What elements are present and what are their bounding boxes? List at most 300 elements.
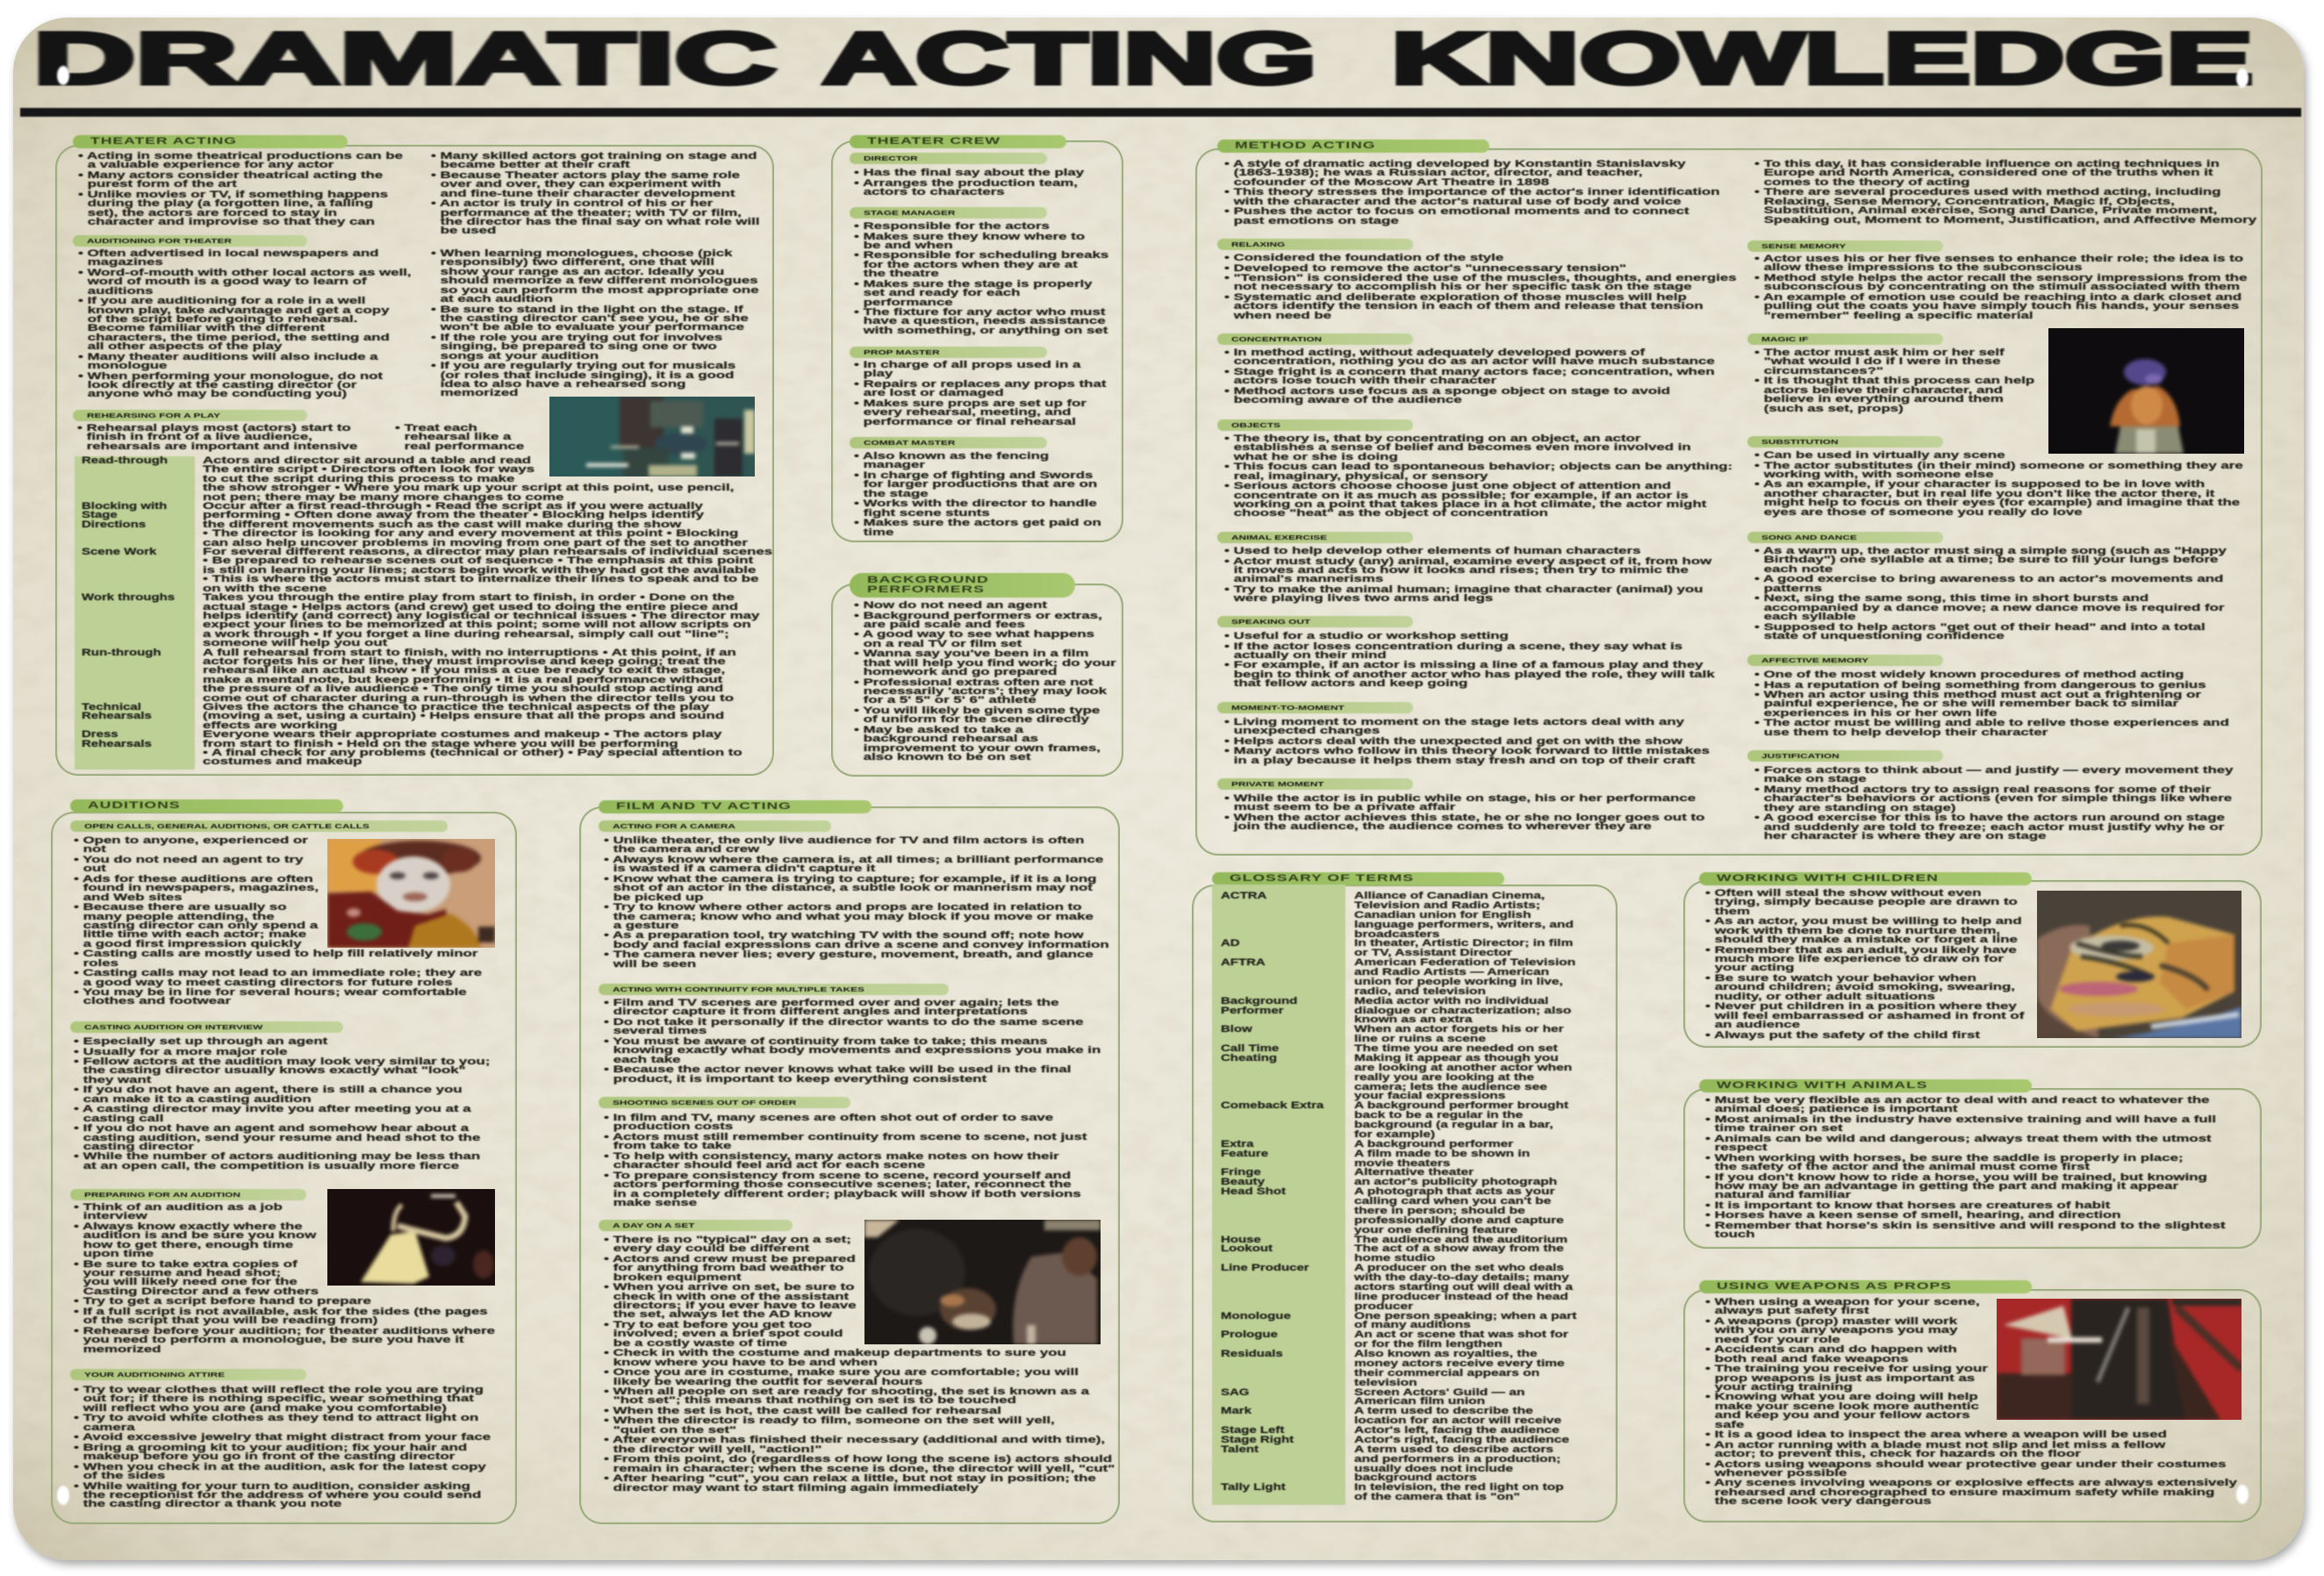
table: glossary terms: Residuals [1221,1349,1283,1359]
table: glossary definitions: location for an actor will receive [1354,1415,1561,1426]
text: song and dance: each note [1764,564,1833,575]
table: rehearsal type terms: Work throughs [82,592,175,603]
table: glossary definitions: Alliance of Canadian Cinema, [1354,891,1545,901]
text: shooting scenes out of order: actors performing those consecutive scenes; later, reconnect the [613,1179,1072,1190]
text: acting with continuity: • Because the actor never knows what take will be used in the final [604,1064,1071,1075]
text: song and dance: Birthday") one syllable at a time; be sure to fill your lungs before [1764,555,2218,565]
text: affective memory: • One of the most widely known procedures of method acting [1754,670,2184,680]
table: glossary definitions: line producer instead of the head [1354,1292,1568,1302]
text: song and dance: • As a warm up, the actor must sing a simple song (such as "Happy [1754,546,2227,556]
text: auditioning for theater right: • If the role you are trying out for involves [431,333,722,343]
text: background performers: background rehearsal as [864,734,1038,744]
text: magic if: • It is thought that this process can help [1754,376,2034,386]
text: combat master: the stage [864,489,929,499]
text: acting for a camera: a gesture [613,921,679,931]
text: concentration: • Stage fright is a concern that many actors face; concentration, when [1224,367,1715,377]
text: sense memory: • Actor uses his or her five senses to enhance their role; the idea is to [1754,254,2243,264]
text: audition wardrobe: of the sides [83,1471,165,1481]
image: stage scene [549,397,755,476]
text: auditioning for theater right: idea to also have a rehearsed song [441,379,685,390]
table: rehearsal type descriptions: The entire script • Directors often look for ways [203,464,534,475]
table: rehearsal type descriptions: from start to finish • Held on the stage where you will be performing [203,739,678,749]
text: a day on a set: involved; even a brief spot could [613,1329,843,1339]
text: cattle calls: • You may be in line for several hours; wear comfortable [74,987,467,998]
text: rehearsing note [395,423,525,453]
text: casting audition: • If you do not have an agent and somehow hear about a [74,1123,469,1134]
text: acting with continuity: several times [613,1026,707,1036]
text: using weapons as props: both real and fake weapons [1715,1354,1908,1365]
text: shooting scenes out of order [604,1114,1087,1208]
table: glossary terms: Background [1221,996,1297,1006]
text: casting audition: they want [83,1075,151,1085]
table: glossary definitions: television [1354,1378,1417,1388]
text: a day on a set: • Actors and crew must be prepared [604,1254,856,1264]
text: concentration: • Method actors use focus as a sponge object on stage to avoid [1224,386,1670,397]
text: acting for a camera: • Always know where the camera is, at all times; a brilliant performance [604,855,1103,865]
text: a day on a set [604,1236,1115,1494]
table: rehearsal type descriptions: expect your lines to be memorized at this point; some will not allow scripts on [203,620,751,630]
text: acting with continuity: product, it is important to keep everything consistent [613,1074,986,1085]
text: substitution: another character, but in real life you don't like the actor there, it [1764,489,2214,499]
text: affective memory: • Has a reputation of being something from dangerous to genius [1754,679,2206,690]
text: magic if: circumstances?" [1764,366,1883,376]
text: auditioning for theater: word of mouth is a good way to learn of [88,276,367,287]
text: combat master: fight scene stunts [864,508,990,519]
text: preparing for an audition: interview [83,1211,147,1221]
subheading: director [850,153,1047,164]
text: magic if: actors believe their character, and [1764,385,2003,396]
text: shooting scenes out of order: make sense [613,1198,697,1208]
table: glossary terms [1221,892,1323,1493]
table: glossary terms: Line Producer [1221,1263,1309,1273]
text: a day on a set: • When the director is ready to film, someone on the set will yell, [604,1415,1055,1426]
text: auditioning for theater right: memorized [441,388,519,398]
text: concentration: concentration, nothing you do as an actor will have much substance [1234,356,1715,367]
text: a day on a set: • Check in with the costume and makeup departments to sure you [604,1348,1066,1358]
table: glossary definitions: of many auditions [1354,1320,1471,1330]
text: private moment: join the audience, the audience comes to wherever they are [1234,821,1652,832]
text: background performers: necessarily 'actors'; they may look [864,686,1107,697]
text: audition wardrobe: will reflect who you are (and make you comfortable) [83,1403,447,1414]
text: acting for a camera: • The camera never lies; every gesture, movement, breath, and glance [604,949,1094,960]
text: acting for a camera: body and facial expressions can drive a scene and convey information [613,940,1109,950]
text: sense memory: subconscious by concentrating on the stimuli associated with them [1764,282,2240,292]
table: glossary definitions: A term used to describe the [1354,1406,1533,1416]
text: song and dance: each syllable [1764,612,1856,622]
table: rehearsal type terms: Technical [82,702,141,713]
text: animal exercise [1224,547,1711,605]
text: speaking out: • Useful for a studio or workshop setting [1224,631,1509,641]
text: animal exercise: animal's mannerisms [1234,574,1383,584]
table: glossary definitions: back to be a regular in the [1354,1110,1523,1121]
table: rehearsal type descriptions: rehearsal like an actual show • If you miss a cue be ready to exit the stage, [203,665,725,676]
heading: film and tv acting: FILM AND TV ACTING [616,801,792,812]
table: glossary terms: Feature [1221,1149,1268,1159]
text: preparing for an audition: of the script that you will be reading from) [83,1315,377,1326]
table: rehearsal type descriptions: • A final check for any problems (technical or other) • Pay special attention to [203,748,742,758]
text: magic if: (such as set, props) [1764,404,1904,414]
text: using weapons as props: • An actor running with a blade must not slip and let miss a fellow [1705,1440,2165,1451]
text: cattle calls: out [83,863,106,874]
heading: using weapons as props: USING WEAPONS AS PROPS [1717,1281,1952,1292]
text: stage manager: with something, or anything on set [864,326,1108,336]
heading: background performers: BACKGROUND [867,575,989,585]
text: method acting intro right: Relaxing, Sense Memory, Concentration, Magic If, Objects, [1764,197,2175,207]
table: glossary terms: Beauty [1221,1177,1265,1187]
text: a day on a set: • There is no "typical" day on a set; [604,1235,851,1245]
panel: working with animals [1683,1088,2262,1249]
subheading: a day on a set: A DAY ON A SET [613,1221,694,1229]
table: glossary definitions: Media actor with no individual [1354,996,1548,1006]
text: using weapons as props [1705,1298,2237,1508]
text: combat master: • Makes sure the actors get paid on [854,518,1101,528]
table: glossary definitions: really you are looking at the [1354,1072,1534,1083]
text: magic if: believe in everything around them [1764,394,2004,405]
subheading: song and dance: SONG AND DANCE [1761,534,1857,541]
subheading: a day on a set [599,1220,793,1231]
text: background performers: homework and go prepared [864,667,1057,677]
heading: using weapons as props [1699,1280,2032,1293]
heading: working with animals [1699,1079,2032,1092]
text: a day on a set: • When all people on set are ready for shooting, the set is known as a [604,1386,1089,1397]
text: justification: • Many method actors try to assign real reasons for some of their [1754,784,2211,795]
text: cattle calls: • Casting calls are mostly used to help fill relatively minor [74,949,477,959]
table: rehearsal type terms: Read-through [82,455,168,466]
text: cattle calls: • Open to anyone, experienced or [74,835,308,846]
text: shooting scenes out of order: • To help with consistency, many actors make notes on how their [604,1151,1059,1162]
table: rehearsal type column [75,456,195,770]
text: director: actors to characters [864,187,1005,197]
text: audition wardrobe: • Try to wear clothes that will reflect the role you are trying [74,1385,484,1395]
table: glossary definitions: An act or scene that was shot for [1354,1329,1568,1340]
text: song and dance: patterns [1764,584,1822,594]
text: auditioning for theater: • Word-of-mouth with other local actors as well, [78,268,412,278]
text: substitution [1754,451,2243,518]
table: glossary definitions: Actor's left, facing the audience [1354,1425,1560,1436]
subheading: concentration [1217,333,1413,345]
subheading: relaxing [1217,239,1413,250]
table: glossary definitions: broadcasters [1354,928,1439,939]
table: glossary terms: SAG [1221,1386,1249,1397]
table: glossary definitions: A film made to be shown in [1354,1149,1530,1159]
text: working with animals [1705,1096,2226,1241]
table: glossary terms: Talent [1221,1444,1259,1455]
text: affective memory: • When an actor using this method must act out a frightening or [1754,690,2201,700]
text: acting for a camera: • Know what the camera is trying to capture; for example, if it is a long [604,874,1096,885]
text: working with animals: • Must be very flexible as an actor to deal with and react to whatever the [1705,1095,2210,1106]
subheading: objects [1217,419,1413,431]
text: preparing for an audition: how to get there, enough time [83,1240,293,1250]
text: speaking out: that fellow actors and keep going [1234,678,1467,689]
text: substitution: • The actor substitutes (in their mind) someone or something they are [1754,460,2243,470]
text: a day on a set: know where you have to be and when [613,1358,878,1368]
text: working with children: • Often will steal the show without even [1705,888,1981,899]
subheading: private moment [1217,778,1413,790]
text: auditioning for theater right: the casting director can't see you, he or she [441,313,749,324]
text: using weapons as props: whenever possible [1715,1468,1847,1479]
text: auditioning for theater right: (or roles that include singing), it is a good [441,370,734,381]
text: background performers: • May be asked to take a [854,725,1023,735]
text: justification: character's behaviors or actions (even for simple things like where [1764,793,2232,804]
text: director: • Has the final say about the play [854,168,1084,178]
text: method acting intro: past emotions on stage [1234,216,1399,226]
text: using weapons as props: always put safety first [1715,1306,1869,1316]
subheading: acting for a camera: ACTING FOR A CAMERA [613,822,735,830]
panel: glossary of terms [1192,885,1617,1522]
title rule [20,108,2301,117]
text: auditioning for theater: anyone who may be conducting you) [88,389,347,399]
text: a day on a set: • Try to eat before you get too [604,1320,812,1330]
title [33,18,2254,99]
text: acting with continuity: each take [613,1055,680,1065]
subheading: animal exercise: ANIMAL EXERCISE [1231,534,1327,541]
text: moment to moment [1224,718,1710,766]
table: glossary definitions: movie theaters [1354,1158,1450,1169]
heading: background performers: PERFORMERS [867,584,985,595]
text: stage manager [854,222,1108,336]
text: background performers: • Background performers or extras, [854,611,1102,621]
text: preparing for an audition: you will likely need one for the [83,1277,298,1287]
text: combat master: time [864,527,893,538]
table: glossary definitions: In television, the red light on top [1354,1482,1564,1493]
text: auditioning for theater: of the script before going to rehearsal. [88,314,357,325]
table: glossary terms: Mark [1221,1406,1252,1416]
text: theater acting intro right: performance at the theater; with TV or film, [441,208,742,218]
text: working with animals: • If you don't know how to ride a horse, you will be trained, but knowing [1705,1172,2207,1183]
panel: theater crew [831,140,1123,542]
text: using weapons as props: • Actors using weapons should wear protective gear under their costumes [1705,1459,2227,1470]
text: substitution: working with, with someone else [1764,469,1994,480]
text: working with children: around children; avoid smoking, swearing, [1715,982,2015,992]
text: theater acting intro right: became better at their craft [441,160,630,170]
table: glossary definitions: line or ruins a scene [1354,1034,1486,1044]
text: auditioning for theater right: responsibly) two different, one that will [441,257,714,268]
text: auditioning for theater right: • When learning monologues, choose (pick [431,248,732,259]
text: stage manager: • Makes sure the stage is properly [854,279,1093,290]
text: rehearsing note: real performance [405,441,524,452]
subheading: justification: JUSTIFICATION [1761,752,1840,760]
text: prop master: are lost or damaged [864,388,1004,398]
table: glossary definitions: Television and Radio Artists; [1354,900,1540,911]
mounting hole: top right [2236,68,2249,88]
table: glossary terms: Extra [1221,1139,1253,1150]
table: glossary terms: Tally Light [1221,1482,1286,1493]
text: method acting intro right: Speaking out, Moment to Moment, Justification, and Affective Memory [1764,215,2256,226]
text: auditioning for theater: monologue [88,361,167,371]
subheading: director: DIRECTOR [864,154,918,162]
text: speaking out: • For example, if an actor is missing a line of a famous play and they [1224,660,1704,670]
heading: glossary of terms: GLOSSARY OF TERMS [1230,873,1414,884]
text: background performers: also known to be on set [864,752,1030,763]
table: rehearsal type terms [81,455,176,749]
table: glossary definitions: and performers in a production; [1354,1454,1560,1465]
text: preparing for an audition: • Think of an audition as a job [74,1202,283,1213]
table: glossary definitions: their commercial appears on [1354,1368,1539,1379]
table: rehearsal type descriptions: a work through • If you forget a line during rehearsal, simply call out "line"; [203,629,729,640]
table: glossary definitions: In theater, Artistic Director; in film [1354,938,1573,949]
text: background performers: on a real TV or film set [864,639,1022,649]
text: auditioning for theater right: so you can perform the most appropriate one [441,285,759,296]
text: method acting intro right: comes to the theory of acting [1764,177,1969,188]
text: rehearsing note: rehearsal like a [405,432,511,442]
text: justification: • Forces actors to think about — and justify — every movement they [1754,765,2234,776]
text: prop master: • Repairs or replaces any props that [854,379,1106,390]
text: casting audition: casting director [83,1142,194,1152]
table: rehearsal type descriptions: actual stage • Helps actors (and crew) get used to doing the entire piece and [203,602,738,612]
table: rehearsal type descriptions: Occur after a first read-through • Read the script as if you were actually [203,501,703,512]
text: justification: make on stage [1764,774,1867,784]
text: working with children: • As an actor, you must be willing to help and [1705,916,2022,927]
table: glossary terms: Stage Right [1221,1435,1294,1445]
table: glossary terms: Prologue [1221,1329,1278,1340]
text: a day on a set: • From this point, do (regardless of how long the scene is) actors should [604,1454,1112,1465]
table: rehearsal type terms: Dress [82,729,118,740]
table: glossary definitions: and Radio Artists — American [1354,967,1549,978]
subheading: preparing for an audition [70,1189,306,1200]
text: shooting scenes out of order: in a completely different order; playback will show if both versions [613,1189,1081,1200]
subheading: magic if: MAGIC IF [1761,335,1808,343]
subheading: rehearsing for a play: REHEARSING FOR A PLAY [87,412,220,419]
table: glossary definitions: Alternative theater [1354,1167,1474,1178]
text: auditioning for theater right [430,248,760,398]
text: prop master: performance or final rehearsal [864,417,1076,427]
text: casting audition: at an open call, the competition is usually more fierce [83,1161,459,1171]
text: method acting intro right: • To this day, it has considerable influence on acting techniques in [1754,159,2220,169]
text: working with children: trying, simply because people are drawn to [1715,897,2018,907]
text: method acting intro right [1754,160,2256,226]
text: objects [1224,434,1732,519]
text: combat master: for larger productions that are on [864,479,1097,490]
text: working with children: an audience [1715,1020,1800,1030]
subheading: affective memory: AFFECTIVE MEMORY [1761,656,1869,664]
table: glossary definitions: A term used to describe actors [1354,1444,1553,1455]
table: glossary definitions: an actor's publicity photograph [1354,1177,1557,1187]
text: acting for a camera: is wasted if a camera didn't capture it [613,863,875,874]
text: preparing for an audition: upon time [83,1249,154,1259]
text: cattle calls [74,836,482,1007]
table: glossary definitions: When an actor forgets his or her [1354,1024,1564,1035]
text: shooting scenes out of order: • Actors must still remember continuity from scene to scene, not just [604,1132,1087,1143]
subheading: moment to moment: MOMENT-TO-MOMENT [1231,704,1345,712]
text: method acting intro: (1863-1938); he was a Russian actor, director, and teacher, [1234,168,1643,178]
text: stage manager: performance [864,297,953,308]
heading: auditions: AUDITIONS [88,800,180,811]
text: audition wardrobe: • When you check in at the audition, ask for the latest copy [74,1462,486,1472]
text: auditioning for theater: all other aspects of the play [88,341,282,352]
subheading: casting audition [70,1021,343,1033]
heading: working with children [1699,872,2032,885]
table: rehearsal type descriptions: Everyone wears their appropriate costumes and makeup • The actors play [203,729,721,740]
text: theater acting intro [77,151,404,228]
table: glossary definitions: A background performer [1354,1139,1513,1150]
title: KNOWLEDGE [1391,18,2253,99]
text: sense memory: pulling out the coats you have simply touch his hands, your senses [1764,301,2239,312]
table: rehearsal type terms: Rehearsals [82,711,152,721]
text: rehearsing for a play: • Rehearsal plays most (actors) start to [77,423,351,433]
subheading: speaking out: SPEAKING OUT [1231,618,1310,626]
text: a day on a set: broken equipment [613,1272,742,1283]
subheading: private moment: PRIVATE MOMENT [1231,780,1324,788]
table: rehearsal type descriptions: to cut the script during this process to make [203,474,514,484]
table: glossary term column [1212,885,1345,1505]
text: method acting intro: • This theory stresses the importance of the actor's inner identification [1224,187,1719,197]
text: acting with continuity: knowing exactly what body movements and expressions you make in [613,1045,1101,1056]
text: a day on a set: remain in character; when the scene is done, the director will yell, "cut" [613,1464,1115,1474]
text: cattle calls: casting director can only spend a [83,921,318,931]
text: theater acting intro right: the director has the final say on what role will [441,217,760,227]
table: glossary terms: AD [1221,938,1240,949]
table: glossary definitions: Screen Actors' Guild — an [1354,1386,1524,1397]
table: rehearsal type descriptions: A full rehearsal from start to finish, with no interruptions • At this point, if an [203,648,736,658]
text: audition wardrobe: • Bring a grooming kit to your audition; fix your hair and [74,1443,467,1453]
table: glossary definitions: The time you are needed on set [1354,1043,1558,1054]
text: cattle calls: a good way to meet casting directors for future roles [83,978,453,988]
text: justification: her character is where they are on stage [1764,831,2047,842]
text: song and dance [1754,547,2227,641]
subheading: combat master: COMBAT MASTER [864,439,955,447]
text: magic if: • The actor must ask him or her self [1754,347,2005,358]
heading: theater crew [850,135,1066,148]
text: working with animals: how may be an advantage in getting the part and making it appear [1715,1181,2178,1192]
title: DRAMATIC [33,18,777,99]
text: working with animals: natural and familiar [1715,1190,1851,1200]
text: working with children [1705,889,2024,1041]
heading: theater crew: THEATER CREW [867,136,1001,147]
text: acting for a camera [604,836,1109,970]
text: combat master: • In charge of fighting and Swords [854,470,1093,481]
panel: working with children [1683,880,2262,1048]
text: using weapons as props: • It is a good idea to inspect the area where a weapon will be used [1705,1429,2167,1440]
text: working with children: work with them be done to nurture them, [1715,926,2000,936]
text: a day on a set: • After hearing "cut", you can relax a little, but not stay in position; the [604,1473,1096,1484]
text: rehearsing note: • Treat each [395,423,477,433]
text: substitution: might help to focus on their eyes (for example) and imagine that the [1764,498,2240,508]
text: shooting scenes out of order: • To prepare consistency from scene to scene, record yourself and [604,1171,1071,1181]
table: glossary definitions: Making it appear as though you [1354,1053,1559,1064]
text: combat master: • Works with the director to handle [854,498,1097,509]
text: stage manager: be and when [864,240,953,251]
heading: method acting [1217,140,1489,153]
table: rehearsal type descriptions: actor forgets his or her line, they must improvise and keep going; treat the [203,656,726,667]
text: sense memory: "remember" feeling a specific material [1764,311,2034,321]
text: combat master: manager [864,460,925,470]
text: background performers: for a 5' 5" or 5' 6" athlete [864,695,1036,706]
text: auditioning for theater right: show your range as an actor. Ideally you [441,267,724,277]
text: cattle calls: and Web sites [83,892,183,903]
text: method acting intro: with the character and the actor's natural use of body and voice [1234,197,1682,207]
text: magic if: "what would I do if I were in these [1764,356,2001,367]
table: glossary definitions: for example) [1354,1129,1435,1140]
table: rehearsal type descriptions: the pressure of a live audience • The only time you should stop acting and [203,684,723,694]
text: audition wardrobe: • Try to avoid white clothes as they tend to attract light on [74,1413,478,1423]
text: animal exercise: • Actor must study (any) animal, examine every aspect of it, from how [1224,556,1711,567]
text: auditioning for theater right: singing, be prepared to sing one or two [441,341,717,352]
mounting hole: bottom right [2236,1485,2249,1504]
text: rehearsing for a play [77,423,358,453]
text: animal exercise: were playing lives two arms and legs [1234,593,1493,604]
text: working with animals: • Remember that horse's skin is sensitive and will respond to the slightest [1705,1221,2226,1231]
panel: background performers [831,584,1123,777]
table: glossary definitions: your one defining feature [1354,1225,1517,1236]
table: glossary definitions: background (a regular in a bar, [1354,1120,1553,1130]
text: using weapons as props: actor; to prevent this, check for hazards on the floor [1715,1449,2081,1459]
table: glossary terms: Call Time [1221,1043,1279,1054]
text: theater acting intro: character and improvise so that they can [88,217,375,227]
text: using weapons as props: • A weapons (prop) master will work [1705,1316,1957,1327]
text: background performers: • Now do not need an agent [854,600,1047,611]
table: glossary definitions: Also known as royalties, the [1354,1349,1538,1359]
text: a day on a set: "quiet on the set" [613,1425,736,1436]
